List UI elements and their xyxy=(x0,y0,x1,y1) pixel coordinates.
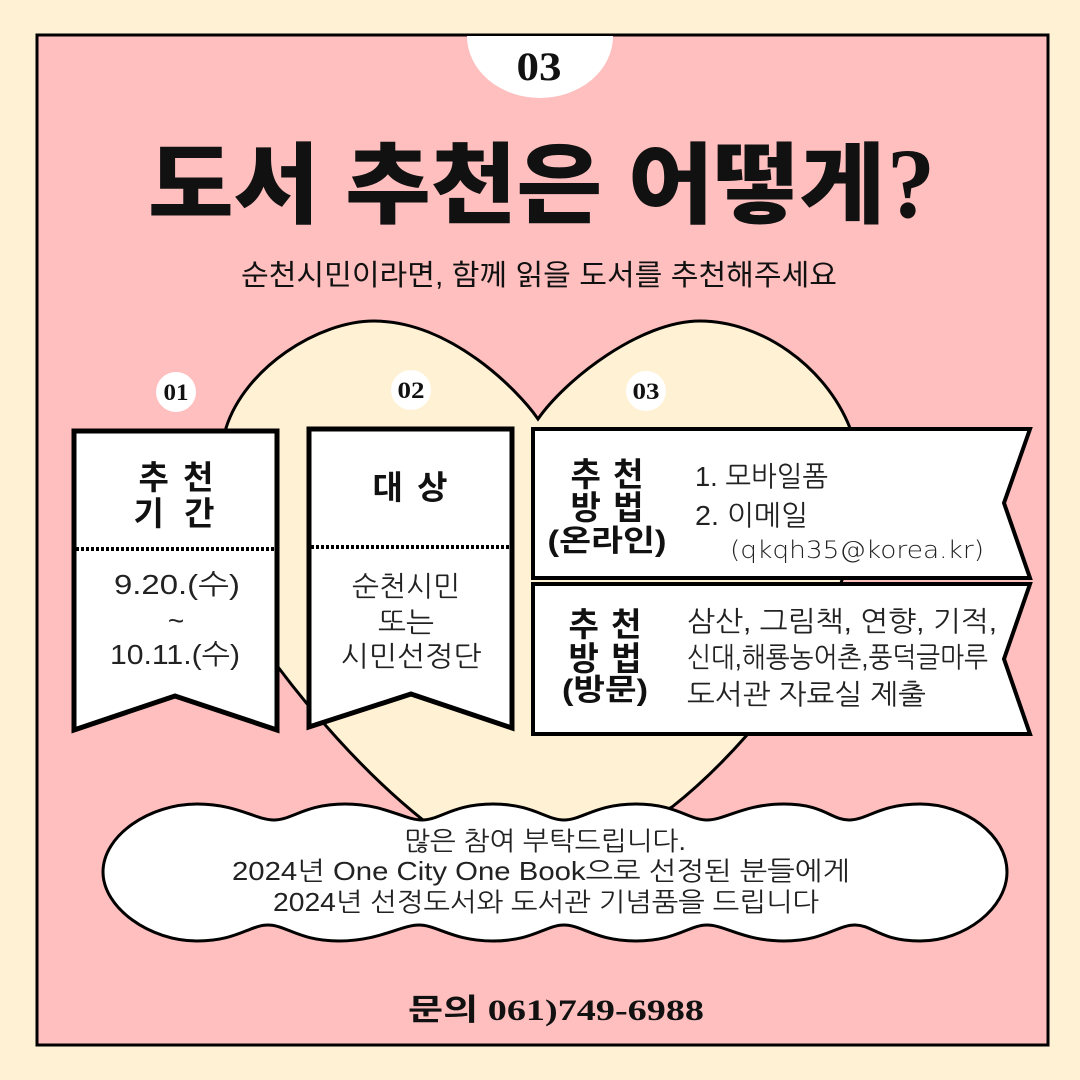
panel: online method: 추 천 xyxy=(570,456,644,493)
panel: period ribbon: 9.20.(수) xyxy=(114,569,240,600)
panel: target ribbon: 시민선정단 xyxy=(340,641,482,672)
panel: visit method: 방 법 xyxy=(568,640,642,677)
panel: online method: (온라인) xyxy=(548,525,666,558)
panel: online method: (qkqh35@korea.kr) xyxy=(730,536,984,564)
title: 도서 추천은 어떻게 xyxy=(148,136,885,235)
panel: online method: 2. 이메일 xyxy=(695,500,808,531)
heart background xyxy=(223,321,859,880)
panel: target ribbon: 또는 xyxy=(378,607,434,638)
panel: visit method: 도서관 자료실 제출 xyxy=(687,679,926,710)
page number badge: 03 xyxy=(516,44,562,89)
number badge 01: 01 xyxy=(164,380,188,405)
panel: period ribbon: ~ xyxy=(168,605,184,636)
panel: online method: 1. 모바일폼 xyxy=(695,461,828,492)
number badge 02: 02 xyxy=(398,378,424,403)
callout cloud: 많은 참여 부탁드립니다. xyxy=(404,826,686,856)
title: ? xyxy=(887,128,935,239)
callout cloud: 2024년 One City One Book으로 선정된 분들에게 xyxy=(232,856,850,886)
panel: online method xyxy=(533,429,1030,578)
panel: period ribbon: 10.11.(수) xyxy=(110,639,240,670)
panel: target ribbon xyxy=(309,429,512,728)
panel: online method: 방 법 xyxy=(570,489,644,526)
contact line: 문의 061)749-6988 xyxy=(408,994,704,1027)
panel: period ribbon xyxy=(74,431,277,730)
page number badge xyxy=(467,36,613,98)
callout cloud xyxy=(103,804,1007,941)
number badge 03: 03 xyxy=(632,379,660,404)
panel: period ribbon: 추 천 xyxy=(138,459,214,496)
callout cloud: 2024년 선정도서와 도서관 기념품을 드립니다 xyxy=(273,887,819,917)
panel: visit method xyxy=(533,584,1030,734)
subtitle: 순천시민이라면, 함께 읽을 도서를 추천해주세요 xyxy=(241,259,837,292)
panel: target ribbon: 순천시민 xyxy=(352,571,460,602)
number badge 02 xyxy=(391,370,431,410)
panel: visit method: 추 천 xyxy=(568,606,642,643)
panel: period ribbon: 기 간 xyxy=(134,495,214,532)
number badge 03 xyxy=(626,371,666,411)
panel: visit method: 신대,해룡농어촌,풍덕글마루 xyxy=(687,642,988,673)
panel: target ribbon: 대 상 xyxy=(372,469,448,506)
panel: visit method: 삼산, 그림책, 연향, 기적, xyxy=(687,606,997,637)
number badge 01 xyxy=(156,372,196,412)
panel: visit method: (방문) xyxy=(562,674,648,707)
